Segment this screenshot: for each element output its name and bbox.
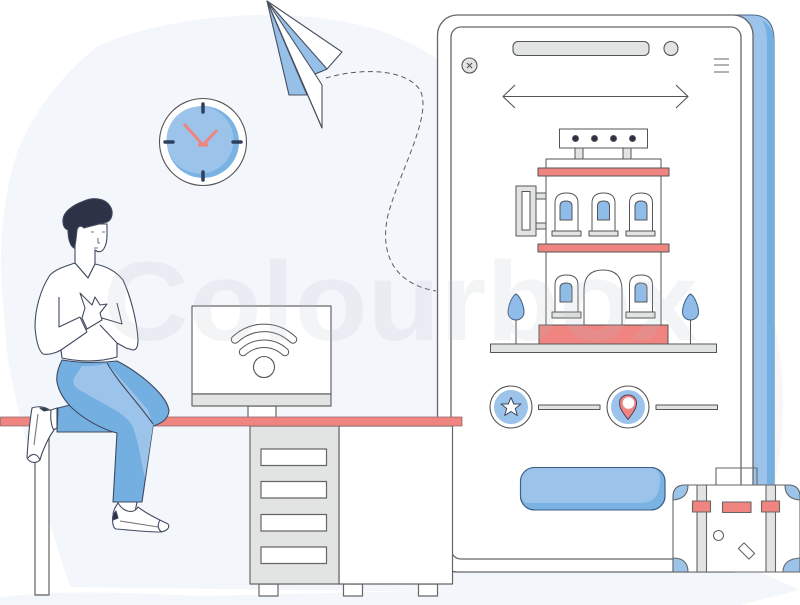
phone screen: [451, 27, 741, 559]
person sitting: [27, 199, 169, 532]
monitor chin: [192, 394, 331, 406]
torso and arms: [35, 263, 138, 361]
suitcase handle: [716, 468, 757, 485]
building walls: [546, 159, 661, 325]
neck and face: [75, 224, 107, 278]
suitcase: [673, 468, 800, 572]
right tree: [682, 294, 698, 344]
cabinet feet: [259, 584, 438, 596]
desk cabinet: [250, 426, 452, 596]
monitor stand: [248, 406, 276, 418]
phone body: [438, 15, 753, 572]
trousers highlight: [73, 363, 153, 478]
wifi icon: [235, 328, 293, 378]
paper plane: [267, 1, 342, 128]
entrance base: [539, 325, 668, 344]
suitcase straps: [697, 485, 706, 572]
raised shoe: [27, 407, 57, 462]
wall clock: [160, 98, 246, 186]
drawer unit: [250, 426, 339, 584]
suitcase body: [673, 485, 800, 572]
desk top: [0, 417, 462, 426]
thigh fold: [107, 363, 153, 424]
upper cornice: [538, 168, 669, 176]
hotel building: [490, 129, 716, 352]
sleeve folds: [59, 297, 117, 350]
upper windows: [552, 193, 655, 236]
door: [584, 270, 622, 325]
hair: [63, 199, 112, 248]
watermark: Colourbox: [103, 239, 698, 364]
white door: [339, 426, 452, 584]
monitor: [192, 306, 331, 418]
monitor screen: [192, 306, 331, 394]
swipe arrow: [503, 85, 688, 108]
drawers: [261, 449, 326, 564]
address bar: [513, 42, 649, 56]
left tree: [508, 294, 524, 344]
ground: [490, 344, 716, 352]
right forearm: [102, 303, 122, 324]
lower windows: [552, 275, 655, 318]
menu icon: [714, 59, 729, 72]
suitcase buckles: [692, 501, 780, 512]
hands: [80, 293, 107, 329]
trousers: [57, 360, 169, 502]
call to action button: [520, 468, 665, 510]
rating line two: [656, 405, 718, 410]
star badge: [490, 386, 532, 428]
phone back edge: [735, 15, 774, 490]
location badge: [607, 386, 649, 428]
close icon: [462, 58, 477, 73]
luggage tag: [738, 543, 755, 559]
phone side shade: [762, 20, 774, 489]
dashed flight path: [326, 72, 436, 291]
back lower leg: [57, 405, 117, 432]
roof sign: [560, 129, 648, 159]
suitcase corners: [673, 485, 800, 572]
rating line one: [538, 405, 600, 410]
suitcase button: [714, 530, 724, 540]
side sign: [516, 186, 546, 236]
desk leg: [35, 426, 49, 595]
cuff: [80, 317, 87, 332]
right blob edge: [774, 320, 783, 490]
middle cornice: [538, 244, 669, 252]
status dot: [664, 42, 678, 56]
face details: [91, 232, 105, 248]
floor shadow: [0, 572, 800, 605]
standing sock and shoe: [113, 502, 169, 532]
